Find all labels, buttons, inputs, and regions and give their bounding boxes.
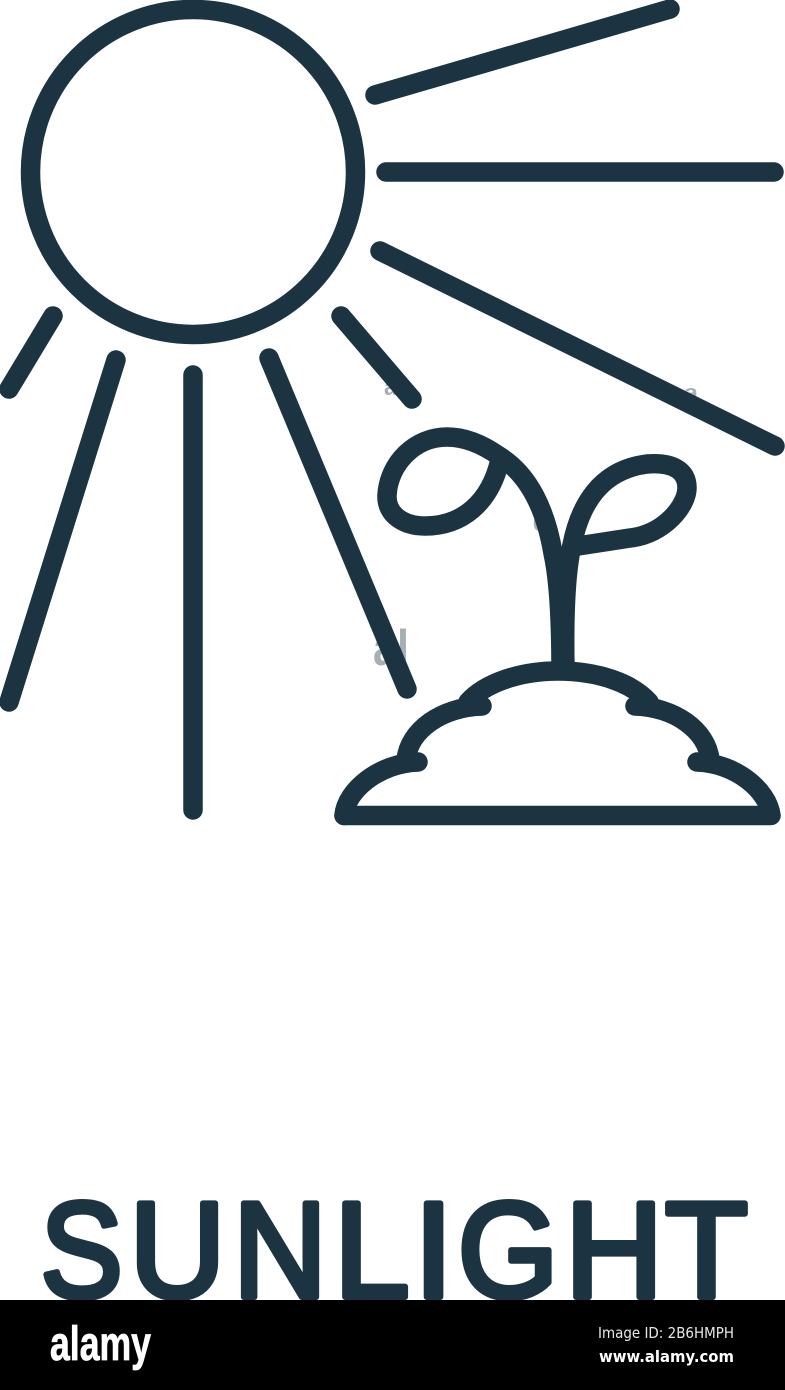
title: U (130, 1174, 226, 1326)
watermark fragments: a (533, 488, 548, 540)
title: L (334, 1174, 410, 1326)
left leaf and stem (387, 437, 561, 670)
title: S (40, 1174, 123, 1326)
title: N (233, 1174, 327, 1326)
watermark fragments: a (384, 374, 398, 401)
rays (9, 9, 775, 810)
watermark fragments: al (373, 620, 409, 676)
title: I (414, 1174, 453, 1326)
image id: Image ID: 2B6HMPH (598, 1324, 734, 1342)
watermark fragments: a (684, 382, 699, 404)
icon: sun disc (30, 10, 356, 334)
right leaf and stem (565, 464, 687, 670)
title (40, 1174, 748, 1326)
soil mound (344, 671, 771, 816)
website: www.alamy.com (599, 1347, 734, 1366)
title: G (458, 1174, 558, 1326)
icon: sprout in soil (344, 437, 771, 816)
title: T (665, 1174, 748, 1326)
footer logo: alamy (50, 1318, 151, 1371)
title: H (565, 1174, 663, 1326)
icon: sun with rays (9, 9, 775, 810)
footer bar (0, 1300, 785, 1390)
watermark fragments (373, 374, 699, 676)
